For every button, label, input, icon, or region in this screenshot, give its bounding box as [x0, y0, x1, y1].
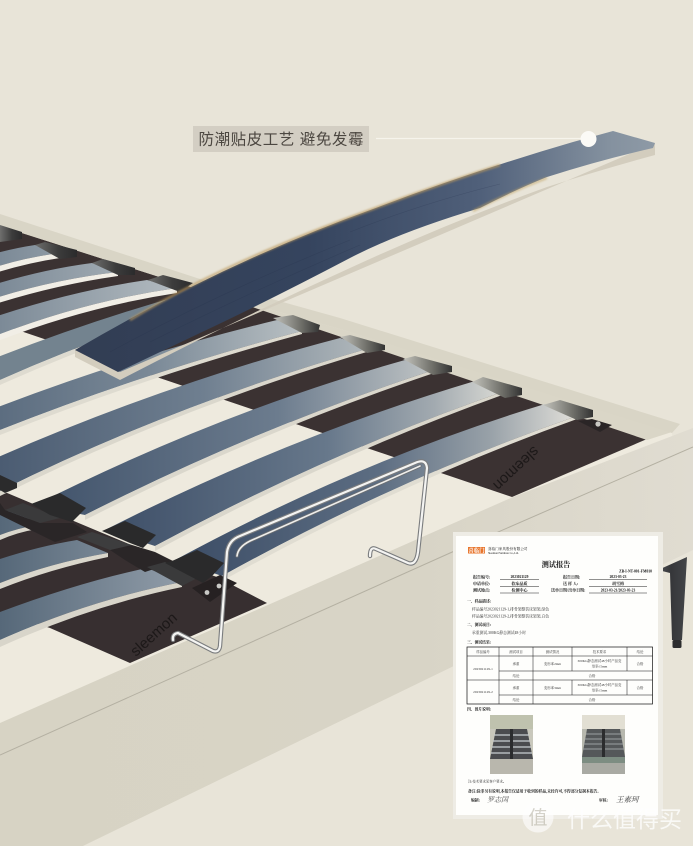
- signature lines: 王素珂: [616, 795, 640, 804]
- test result table: 结论: [637, 649, 644, 654]
- test result table: 2023021129-2: [473, 690, 493, 694]
- lifted veneer slat: [75, 131, 655, 380]
- bolts on centre plate: [192, 575, 237, 602]
- report meta rows: 报告编号:: [473, 574, 490, 580]
- front rail of bed frame: [0, 428, 693, 846]
- report meta rows: 软床品质: [512, 580, 528, 586]
- back rail inner wall: [0, 222, 672, 440]
- slat H: [105, 381, 505, 551]
- report meta rows: 2023-03-23: [610, 575, 627, 579]
- report meta rows: 胡雪梅: [612, 580, 624, 586]
- test result table: 技术要求: [593, 649, 607, 654]
- report meta rows: 检测中心: [512, 586, 528, 592]
- report meta rows: [473, 574, 635, 592]
- test result table: 测试情况: [546, 649, 560, 654]
- report sections text: 三、测试结果:: [467, 640, 491, 644]
- test result table: 合格: [589, 697, 596, 702]
- report number code: ZB-I-NT-001-FM010: [619, 570, 652, 574]
- floor below the rail: [83, 550, 693, 846]
- test result table: 合格: [637, 661, 644, 666]
- golden lower highlight: [473, 178, 547, 211]
- sleemon print near right: sleemon: [490, 443, 543, 494]
- test result table: 300KG静态测试48小时产品变: [578, 682, 622, 687]
- test result table: 300KG静态测试48小时产品变: [578, 658, 622, 663]
- report sections text: 一、样品描述:: [467, 598, 491, 604]
- report note: 注:技术要求见客户要求。: [468, 778, 506, 784]
- callout dot: [580, 131, 596, 147]
- test result table: 2023021129-1: [473, 667, 493, 671]
- watermark: [522, 802, 682, 832]
- report remark: 备注:除非另有说明,本报告仅适用于收到的样品,未经许可,不得部分复制本报告。: [468, 788, 601, 794]
- report meta rows: 2023021129: [511, 575, 529, 579]
- test report sheet: [453, 532, 663, 819]
- golden edge highlight: [130, 165, 500, 320]
- metal slat clips left: [0, 225, 193, 292]
- watermark: 值: [528, 807, 548, 829]
- slat hidden under lifted slat: [0, 290, 220, 394]
- report sections text: [467, 598, 549, 644]
- dark fabric along centre strap: [0, 490, 267, 663]
- left-side slats below centre strap: [0, 510, 182, 647]
- company logo: 喜临门: [468, 546, 485, 554]
- company logo: 喜临门家具股份有限公司: [488, 546, 528, 551]
- report sections text: 样品编号2023021129-2,排骨架整装床架架,白色: [472, 614, 549, 620]
- test result table: 变形率3mm: [544, 685, 561, 690]
- signature lines: 审核:: [599, 798, 608, 802]
- slat F: [0, 338, 370, 496]
- test result table: 承重: [513, 661, 520, 666]
- slat E: [0, 320, 302, 443]
- test result table: 形率≤5mm: [592, 688, 608, 692]
- slats: far left group: [0, 245, 177, 348]
- company logo: [468, 546, 528, 555]
- wood grain: [110, 184, 500, 352]
- test result table: [467, 647, 652, 704]
- cream base between slats: [0, 226, 693, 846]
- signature lines: [471, 795, 640, 804]
- report sections text: 承重测试,300KG静态测试48小时: [472, 630, 526, 636]
- report meta rows: 送 样 人:: [563, 580, 578, 586]
- report sections text: 样品编号2023021129-1,排骨架整装床架架,绿色: [472, 606, 549, 612]
- report photo 1: [490, 715, 533, 774]
- report meta rows: 2023-03-21/2023-03-23: [601, 588, 635, 592]
- test result table: 测试项目: [509, 649, 523, 654]
- chrome bed rail wire: [173, 461, 427, 651]
- watermark: 什么值得买: [567, 806, 682, 832]
- report meta rows: 送单日期/出单日期:: [551, 586, 585, 592]
- test result table: 变形率2mm: [544, 661, 561, 666]
- metal slat clips right: [273, 315, 593, 420]
- meta underlines: [500, 580, 647, 593]
- slat I: [175, 404, 577, 581]
- test result table: 合格: [637, 685, 644, 690]
- section heading: photos: 四、图片说明:: [467, 706, 491, 712]
- signature lines: 罗志国: [487, 796, 509, 804]
- signature lines: 编制:: [471, 798, 480, 802]
- report meta rows: 测试地点:: [473, 586, 490, 592]
- test result table: 结论: [513, 673, 520, 678]
- report meta rows: 报告日期:: [563, 574, 580, 580]
- test result table: 合格: [589, 673, 596, 678]
- test result table: 承重: [513, 685, 520, 690]
- report meta rows: 申请单位:: [473, 580, 490, 586]
- mounting bolt at right: [578, 419, 612, 432]
- slat G: [35, 360, 437, 520]
- sleemon print near centre: sleemon: [127, 609, 181, 660]
- furniture leg: [658, 557, 687, 648]
- test result table: 结论: [513, 697, 520, 702]
- rail stitch line: [0, 447, 693, 755]
- report title: 测试报告: [542, 560, 570, 569]
- report sections text: 二、测试项目:: [467, 622, 491, 627]
- test result table: 样品编号: [476, 649, 490, 654]
- centre black straps: [0, 475, 224, 586]
- company logo: Sleemon Furniture Co.,Ltd.: [488, 552, 519, 555]
- callout label: [193, 126, 369, 152]
- back rail top edge: [0, 214, 680, 433]
- test result table: 形率≤5mm: [592, 664, 608, 668]
- callout label: 防潮贴皮工艺 避免发霉: [198, 130, 364, 148]
- report photo 2: [582, 715, 625, 774]
- callout leader line: [376, 138, 582, 140]
